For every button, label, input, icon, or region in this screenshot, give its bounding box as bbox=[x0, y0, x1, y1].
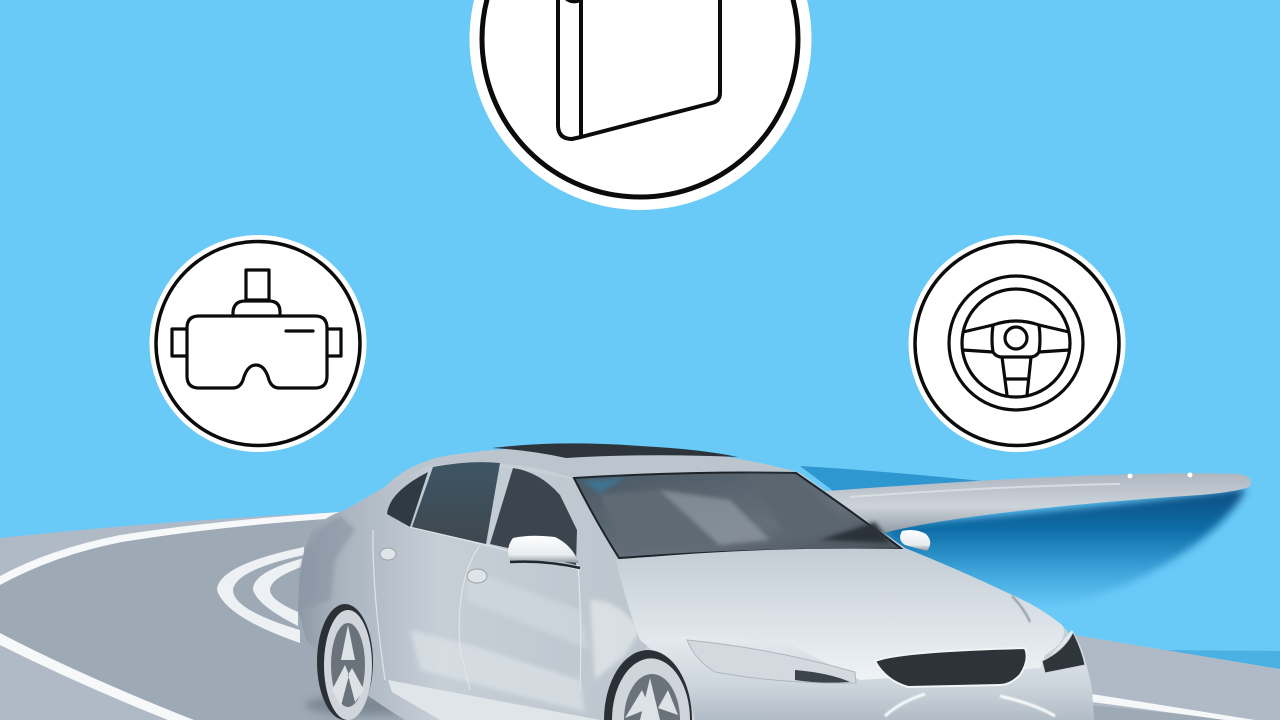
windshield bbox=[574, 473, 902, 558]
road edge line, lower bbox=[0, 633, 194, 720]
badge bbox=[150, 235, 366, 452]
icon: book in top circle bbox=[470, 0, 812, 210]
sunroof bbox=[492, 443, 738, 458]
door seams bbox=[373, 513, 581, 690]
rear quarter window bbox=[387, 472, 428, 527]
far fender crease bbox=[1012, 596, 1030, 622]
near headlight bbox=[687, 640, 856, 683]
near mirror base bbox=[510, 562, 580, 568]
windshield interior bbox=[582, 475, 890, 552]
door handles bbox=[380, 548, 487, 583]
car body side bbox=[298, 457, 650, 720]
ground shadow bbox=[305, 695, 425, 715]
car bbox=[298, 443, 1094, 720]
side light reflections bbox=[300, 515, 640, 712]
rear door window bbox=[412, 462, 500, 544]
rear wheel bbox=[317, 604, 373, 720]
car body base bbox=[298, 446, 1094, 720]
book outline bbox=[558, 0, 720, 139]
bumper reflections bbox=[885, 694, 1055, 716]
book top edge bbox=[563, 0, 581, 3]
near mirror bbox=[508, 536, 579, 563]
icon: VR headset in left circle bbox=[150, 235, 366, 452]
hood bbox=[616, 548, 1064, 680]
front door window bbox=[490, 468, 577, 565]
lower sill bbox=[388, 680, 600, 720]
left road section bbox=[0, 512, 620, 720]
shadow behind the elevated road bbox=[800, 466, 1246, 608]
road edge line, upper bbox=[0, 512, 340, 585]
curved lane markings bbox=[217, 547, 304, 643]
right road section bbox=[1075, 635, 1280, 720]
wheel outline bbox=[949, 276, 1083, 410]
badge bbox=[470, 0, 812, 210]
front wheel bbox=[604, 650, 692, 720]
roof bbox=[385, 446, 800, 490]
elevated road curve bbox=[815, 472, 1251, 534]
grille bbox=[875, 648, 1027, 687]
badge bbox=[908, 235, 1126, 452]
front bumper bbox=[640, 630, 1094, 720]
icon: steering wheel in right circle bbox=[908, 235, 1126, 452]
headset outline bbox=[172, 270, 341, 388]
far headlight bbox=[1042, 632, 1085, 673]
far mirror bbox=[900, 530, 930, 551]
